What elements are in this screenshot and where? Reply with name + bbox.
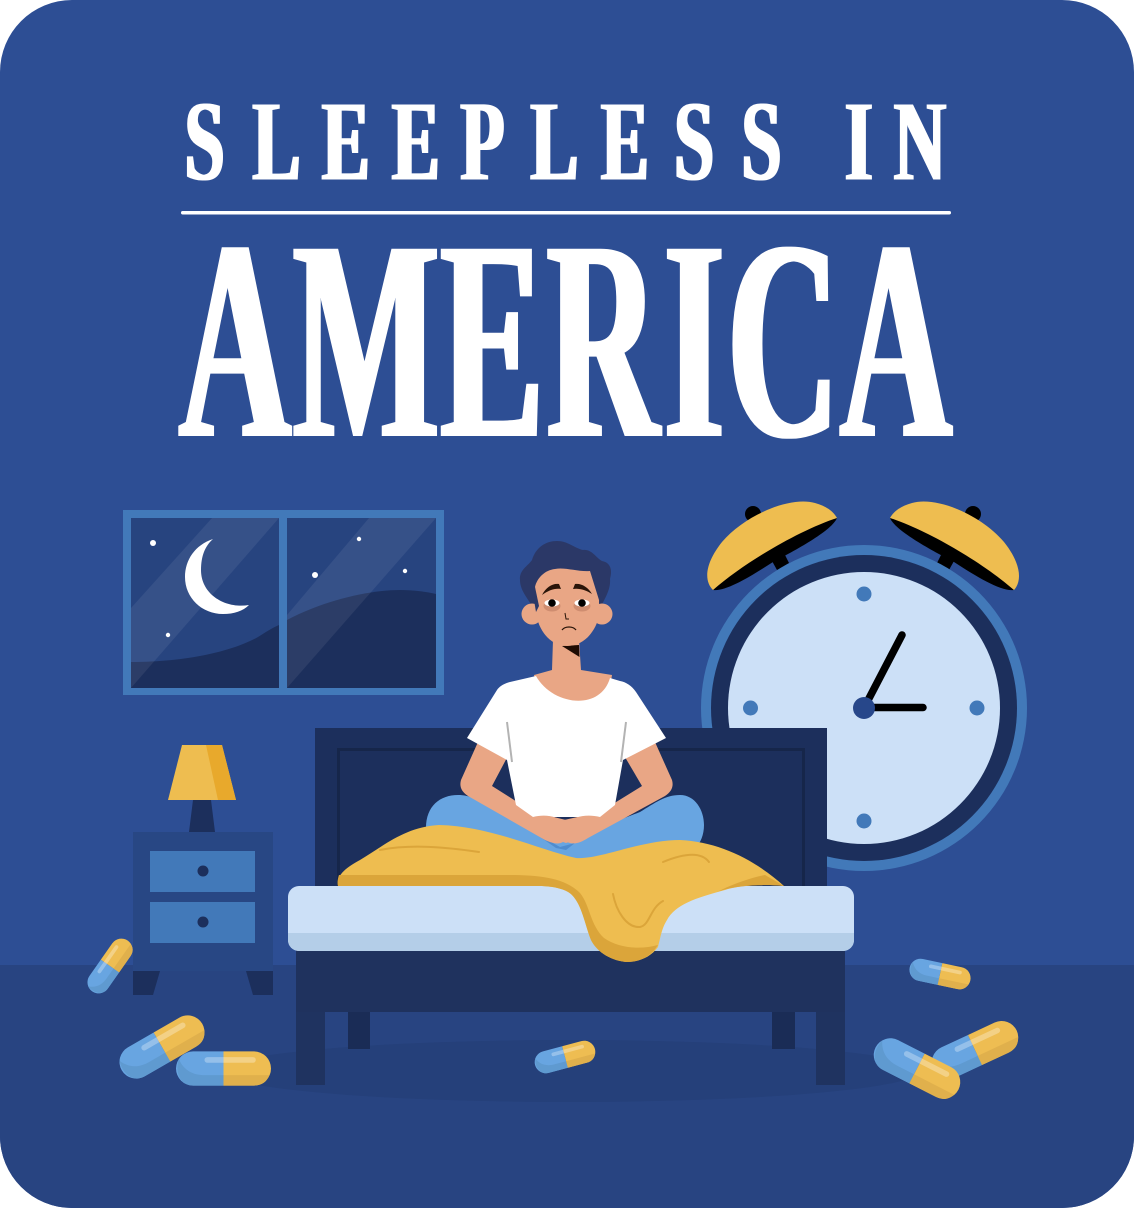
mattress (288, 886, 854, 951)
pill (907, 957, 973, 991)
person sitting up in bed (426, 541, 704, 860)
face features (544, 600, 560, 612)
crossed legs (426, 795, 704, 860)
pill (926, 1016, 1024, 1084)
pill (113, 1009, 211, 1085)
clock hands (864, 635, 923, 708)
bed frame and headboard (296, 728, 845, 1085)
title: Sleepless in: SLEEPLESS IN (185, 78, 946, 205)
title divider line (181, 211, 951, 214)
icon: alarm clock (701, 502, 1027, 871)
pills scattered on floor (83, 934, 1024, 1105)
arms (460, 742, 566, 843)
icon: table lamp (168, 745, 236, 832)
pill (83, 934, 137, 998)
clock bells (707, 502, 1019, 590)
stars (150, 537, 407, 637)
neck and chest (534, 640, 612, 712)
window with night sky (123, 510, 444, 695)
head (520, 541, 612, 646)
yellow blanket (338, 825, 784, 962)
hands (520, 816, 612, 843)
white t-shirt (467, 676, 666, 817)
title: America: AMERICA (179, 181, 952, 498)
pill (176, 1051, 271, 1086)
icon: crescent moon (185, 539, 249, 614)
pill (532, 1038, 598, 1076)
pill (868, 1032, 966, 1105)
nightstand (133, 832, 273, 995)
clock hour markers (743, 586, 984, 828)
